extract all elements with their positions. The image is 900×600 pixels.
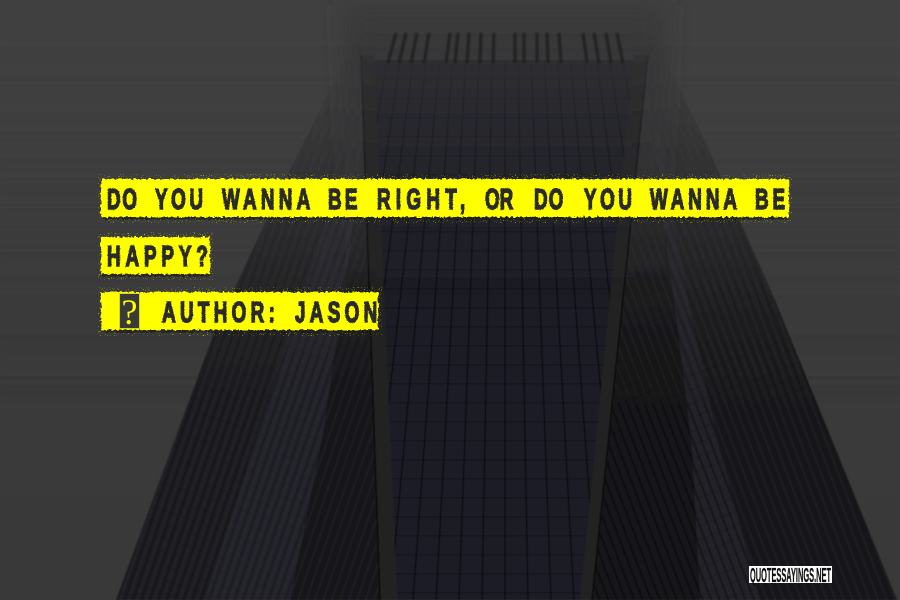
left pillar <box>361 55 397 600</box>
left building face <box>116 30 380 600</box>
quote line 1: BE <box>328 184 357 216</box>
right building face <box>580 30 897 600</box>
top louvers <box>388 33 623 63</box>
quote line 1: DO <box>107 184 137 216</box>
quote line 1: BE <box>755 184 785 216</box>
quote line 2: HAPPY? <box>107 241 208 273</box>
author label: JASON <box>295 297 377 329</box>
building structure <box>116 56 898 600</box>
quote line 1: DO <box>534 184 563 216</box>
quote line 1: YOU <box>584 184 632 216</box>
pillar shadow lines <box>361 55 648 600</box>
right pillar <box>580 55 648 600</box>
quote line 1: YOU <box>155 184 203 216</box>
watermark <box>749 565 832 587</box>
quote line 1: WANNA <box>222 184 310 216</box>
author label: AUTHOR: <box>162 297 275 329</box>
quote line 1: RIGHT, <box>377 184 465 216</box>
centre haze <box>345 5 665 335</box>
author label <box>162 297 377 329</box>
quote text <box>107 184 785 329</box>
yellow highlight bars <box>98 174 792 336</box>
bar shadows <box>102 181 789 332</box>
central grid facade <box>374 60 633 600</box>
icon: missing glyph box: ? <box>122 292 137 332</box>
quote line 1 <box>107 184 785 216</box>
bar speckles <box>98 174 792 336</box>
bar fills <box>101 179 789 330</box>
quote line 1: WANNA <box>650 184 737 216</box>
quote line 1: OR <box>485 184 513 216</box>
